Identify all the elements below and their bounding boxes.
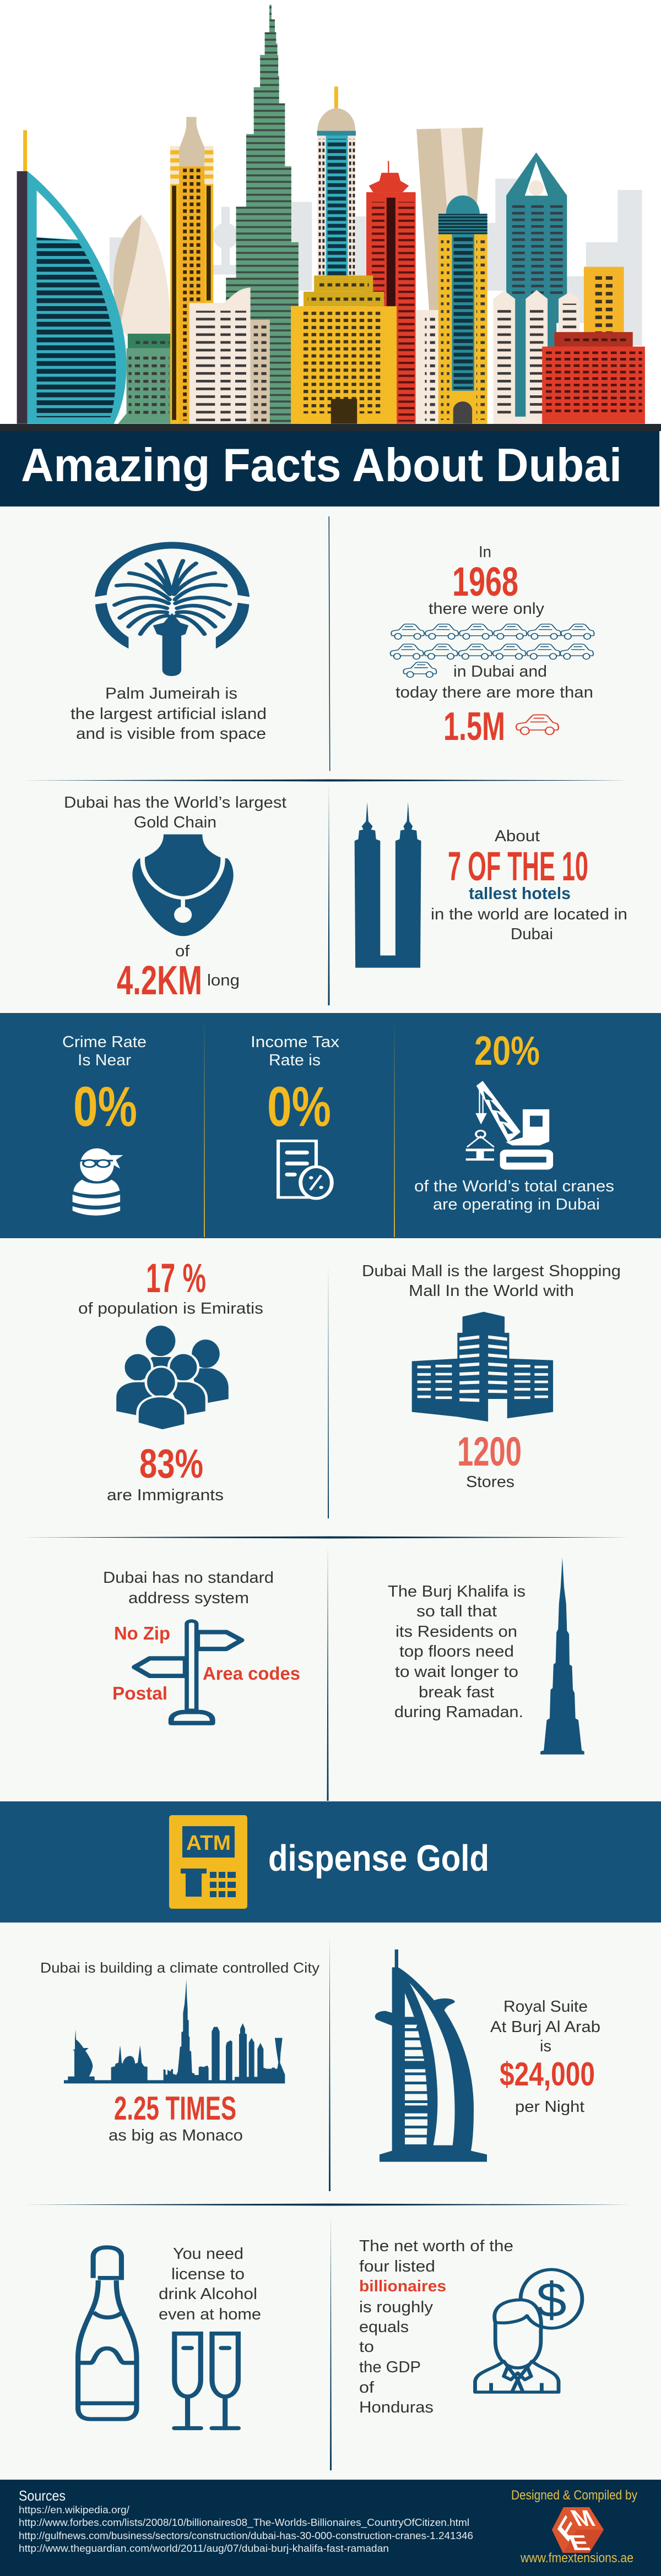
text: tallest hotels: tallest hotels	[469, 884, 571, 903]
red low block	[542, 332, 645, 424]
text: of: of	[175, 943, 190, 960]
icon: Burj Khalifa silhouette	[540, 1557, 584, 1755]
text: gold chain heading: Dubai has the World’s largest	[64, 794, 286, 812]
text: About: About	[495, 827, 540, 845]
text: Royal Suite	[490, 1998, 600, 2055]
text: alcohol: license to	[171, 2265, 245, 2283]
Burj Al Arab	[17, 130, 127, 424]
logo: FME: E	[565, 2531, 593, 2555]
panel: Royal Suite	[375, 1949, 600, 2162]
text: of population: of population is Emiratis	[78, 1300, 263, 1317]
icon: thief	[73, 1148, 123, 1216]
yellow tower	[170, 117, 213, 424]
text: Palm Jumeirah: the largest artificial island	[71, 705, 267, 723]
text: Burj Khalifa fact: to wait longer to	[395, 1663, 518, 1681]
text: crime rate: Is Near	[78, 1052, 131, 1069]
panel: gold chain	[64, 794, 286, 1003]
number: 1.5M: 1.5M	[443, 705, 505, 749]
icon: people group	[115, 1326, 229, 1430]
text: Royal Suite: At Burj Al Arab	[490, 2018, 600, 2036]
number: 4.2KM: 4.2KM	[117, 957, 202, 1003]
cream triple peaks	[493, 290, 579, 424]
dome tower	[438, 195, 487, 424]
source links: http://gulfnews.com/business/sectors/construction/dubai-has-30-000-construction-cranes-1.241346	[19, 2530, 473, 2541]
logo: FME: F	[552, 2510, 581, 2547]
text: income tax: Rate is	[269, 1052, 321, 1069]
text: Palm Jumeirah: and is visible from space	[76, 725, 266, 743]
text: mall heading	[362, 1262, 621, 1300]
text: stores: Stores	[466, 1473, 514, 1491]
panel: Burj Khalifa Ramadan	[388, 1557, 584, 1755]
text: cranes: of the World’s total cranes	[414, 1178, 614, 1195]
number: 20%: 20%	[474, 1028, 540, 1074]
icon: Burj Al Arab	[375, 1949, 487, 2162]
icon: mall building	[412, 1312, 553, 1422]
text: net worth: The net worth of the	[359, 2237, 513, 2255]
text: immigrants: are Immigrants	[107, 1486, 224, 1504]
yellow block	[291, 275, 397, 424]
label: Postal: Postal	[112, 1683, 167, 1703]
text: Burj Khalifa fact: break fast	[419, 1684, 494, 1701]
panel: blue stats band	[0, 1013, 661, 1238]
text: Burj Khalifa fact: during Ramadan.	[394, 1703, 523, 1721]
green low building	[118, 334, 171, 424]
yellow right block	[584, 267, 624, 335]
text: address heading: Dubai has no standard	[103, 1569, 274, 1587]
text: climate heading: Dubai is building a climate controlled City	[40, 1959, 319, 1976]
ground line	[0, 424, 661, 431]
text: as big as Monaco: as big as Monaco	[109, 2127, 243, 2144]
panel: tallest hotels	[355, 802, 627, 968]
text: alcohol	[159, 2245, 261, 2323]
Burj Khalifa	[226, 5, 299, 424]
logo: FME: M	[566, 2506, 600, 2531]
red tower	[366, 161, 416, 424]
panel: ATM band	[0, 1801, 661, 1923]
text: in the world: in the world are located in	[431, 906, 627, 923]
heading: dispense Gold: dispense Gold	[268, 1838, 489, 1879]
credit: website: www.fmextensions.ae	[520, 2551, 633, 2566]
text: mall heading: Dubai Mall is the largest Shopping	[362, 1262, 621, 1280]
panel: climate city	[40, 1959, 319, 2144]
source links: http://www.theguardian.com/world/2011/aug/07/dubai-burj-khalifa-fast-ramadan	[19, 2543, 389, 2554]
icon: ATM: ATM	[186, 1832, 231, 1855]
number: tax 0%: 0%	[267, 1075, 331, 1138]
text: cranes: are operating in Dubai	[433, 1196, 600, 1213]
tan flared tower	[416, 128, 483, 310]
source links: https://en.wikipedia.org/	[19, 2504, 129, 2515]
text: long: long	[207, 972, 240, 989]
text: net worth: the GDP	[359, 2359, 421, 2376]
text: address heading: address system	[128, 1589, 249, 1607]
text: Burj Khalifa fact: The Burj Khalifa is	[388, 1583, 525, 1600]
panel: address system	[103, 1569, 300, 1723]
text: address heading	[103, 1569, 274, 1607]
icon: crane	[466, 1081, 553, 1170]
label: Area codes: Area codes	[203, 1663, 300, 1684]
text: crime rate: Crime Rate	[62, 1033, 147, 1051]
sources heading: Sources	[19, 2487, 66, 2504]
text: net worth: equals	[359, 2318, 409, 2336]
text: alcohol: drink Alcohol	[159, 2285, 257, 2303]
panel: billionaires	[359, 2237, 582, 2416]
text: Burj Khalifa fact: so tall that	[416, 1603, 497, 1620]
text: alcohol: even at home	[159, 2306, 261, 2323]
icon: city skyline	[64, 1979, 285, 2083]
number: 1200: 1200	[457, 1429, 522, 1474]
icon: businessman with dollar: $	[536, 2273, 567, 2327]
icon: necklace	[132, 835, 234, 936]
cyan tower	[317, 86, 356, 278]
text: in the world	[431, 906, 627, 943]
credit: designed by: Designed & Compiled by	[511, 2488, 637, 2503]
number: 17%: 17 %	[146, 1255, 206, 1301]
number: 83%: 83%	[139, 1441, 203, 1486]
icon: ATM	[169, 1815, 247, 1909]
text: gold chain heading: Gold Chain	[134, 814, 216, 831]
logo: FME	[552, 2506, 604, 2555]
text: in Dubai and: in Dubai and	[453, 663, 547, 680]
text: mall heading: Mall In the World with	[409, 1282, 574, 1300]
icon: twin towers	[355, 802, 421, 968]
text: In: In	[479, 543, 491, 561]
text: Palm Jumeirah	[71, 685, 267, 743]
text: income tax: Income Tax	[251, 1033, 340, 1051]
title band	[0, 431, 659, 507]
number: $24,000: $24,000	[500, 2056, 595, 2093]
text: income tax	[251, 1033, 340, 1069]
title: Amazing Facts About Dubai	[21, 439, 622, 492]
teal pointed tower	[506, 153, 567, 417]
panel: Palm Jumeirah	[71, 542, 267, 743]
text: net worth	[359, 2237, 513, 2416]
text: alcohol: You need	[173, 2245, 243, 2263]
panel: cars in 1968	[391, 543, 594, 749]
text: crime rate	[62, 1033, 147, 1069]
icon: palm island	[95, 542, 250, 676]
text: cranes	[414, 1178, 614, 1213]
text: net worth: to	[359, 2338, 374, 2356]
text: Palm Jumeirah: Palm Jumeirah is	[105, 685, 237, 702]
text: net worth: four listed	[359, 2258, 435, 2275]
text: in the world: Dubai	[511, 925, 553, 943]
text: net worth: billionaires	[359, 2278, 446, 2295]
panel: alcohol license	[78, 2245, 261, 2428]
number: crime 0%: 0%	[73, 1075, 137, 1138]
source links	[19, 2504, 473, 2554]
panel: Dubai Mall	[362, 1262, 621, 1491]
text: gold chain heading	[64, 794, 286, 831]
text: today there are more than: today there are more than	[395, 684, 593, 701]
cream building	[189, 287, 270, 424]
icon: thirteen cars	[391, 624, 594, 677]
text: Burj Khalifa fact	[388, 1583, 525, 1721]
text: Burj Khalifa fact: top floors need	[399, 1643, 514, 1660]
number: 2.25 times: 2.25 TIMES	[114, 2090, 236, 2127]
text: Burj Khalifa fact: its Residents on	[395, 1623, 517, 1641]
footer	[0, 2480, 661, 2576]
text: net worth: of	[359, 2379, 375, 2397]
number: 1968: 1968	[452, 559, 518, 604]
text: there were only: there were only	[429, 600, 545, 618]
icon: tax document	[278, 1141, 332, 1199]
text: net worth: Honduras	[359, 2399, 434, 2416]
text: Royal Suite: Royal Suite	[503, 1998, 588, 2016]
text: net worth: is roughly	[359, 2299, 434, 2316]
text: per Night: per Night	[515, 2098, 584, 2116]
label: No Zip: No Zip	[114, 1623, 170, 1643]
icon: champagne glasses	[175, 2334, 238, 2428]
skyline illustration	[17, 5, 645, 424]
icon: champagne bottle	[78, 2247, 137, 2419]
icon: red car	[516, 715, 559, 734]
sail building	[113, 215, 171, 336]
icon: businessman with dollar	[475, 2269, 582, 2392]
cream slim	[416, 310, 447, 424]
panel: population	[78, 1255, 263, 1504]
source links: http://www.forbes.com/lists/2008/10/billionaires08_The-Worlds-Billionaires_CountryOfCitizen.html	[19, 2517, 469, 2529]
icon: signpost	[134, 1621, 242, 1723]
text: Royal Suite: is	[540, 2038, 551, 2055]
